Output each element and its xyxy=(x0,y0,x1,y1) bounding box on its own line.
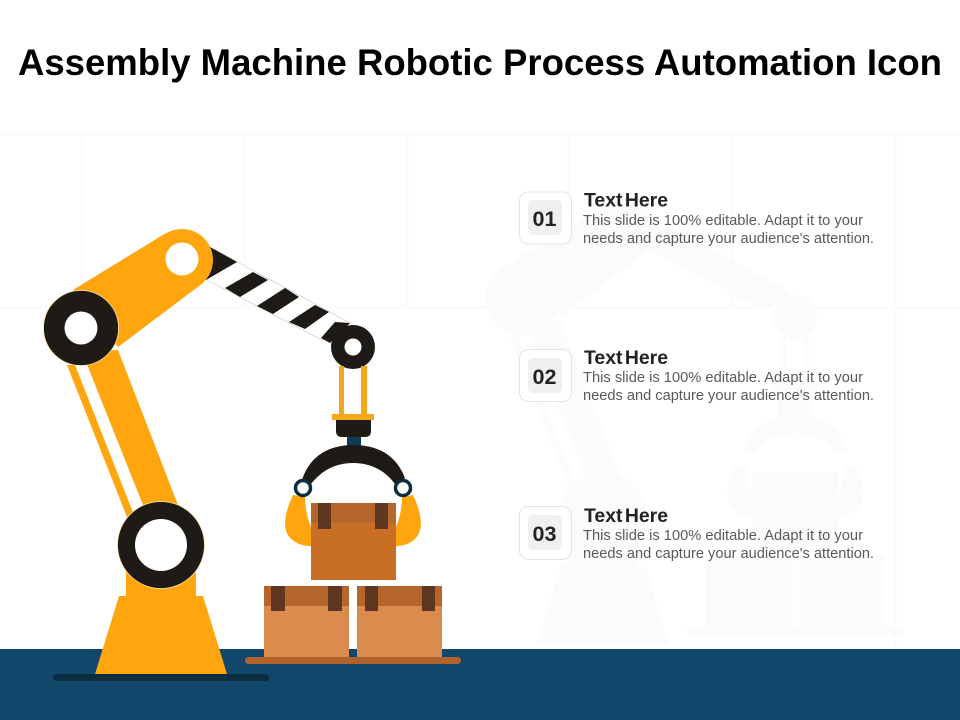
upper arm pivot hole xyxy=(166,242,198,276)
number badge 02: 02 xyxy=(533,365,556,389)
pallet xyxy=(245,657,461,664)
floor band xyxy=(0,649,960,720)
claw right pivot xyxy=(396,480,410,496)
heading 02: Text Here xyxy=(584,348,668,369)
base joint xyxy=(118,502,204,588)
number badge 03 xyxy=(520,506,572,560)
shoulder joint xyxy=(44,290,118,366)
item 01 xyxy=(520,190,874,247)
gripper neck xyxy=(347,437,361,446)
gripper claw xyxy=(302,445,405,484)
description 01 xyxy=(583,213,874,247)
heading 01: Text Here xyxy=(584,190,668,212)
wrist rods xyxy=(332,366,374,420)
description 03: needs and capture your audience's attention. xyxy=(583,546,874,562)
wrist joint xyxy=(331,325,375,369)
gripper fingers xyxy=(285,495,421,546)
description 01: This slide is 100% editable. Adapt it to your xyxy=(583,213,863,229)
base shadow xyxy=(53,674,269,681)
item 02 xyxy=(520,348,874,404)
stacked box left xyxy=(264,586,349,657)
description 02: needs and capture your audience's attention. xyxy=(583,388,874,404)
robot base xyxy=(95,570,227,674)
striped forearm xyxy=(200,247,350,343)
description 02 xyxy=(583,370,874,404)
title: Assembly Machine Robotic Process Automation Icon xyxy=(18,41,942,83)
lower arm struts xyxy=(67,350,178,517)
description 03: This slide is 100% editable. Adapt it to your xyxy=(583,528,863,544)
number badge 02 xyxy=(520,350,572,402)
upper arm xyxy=(73,229,213,347)
watermark: ghost robot arm silhouette xyxy=(486,199,903,644)
number badge 01 xyxy=(520,192,572,244)
gripper head xyxy=(336,420,371,437)
description 01: needs and capture your audience's attention. xyxy=(583,231,874,247)
stacked box right xyxy=(357,586,442,657)
item 03 xyxy=(520,506,874,562)
claw left pivot xyxy=(296,480,310,496)
number badge 01: 01 xyxy=(533,207,556,231)
held box xyxy=(311,503,396,580)
heading 03: Text Here xyxy=(584,506,668,527)
description 02: This slide is 100% editable. Adapt it to your xyxy=(583,370,863,386)
description 03 xyxy=(583,528,874,562)
robot arm illustration xyxy=(44,229,461,681)
number badge 03: 03 xyxy=(533,522,556,546)
